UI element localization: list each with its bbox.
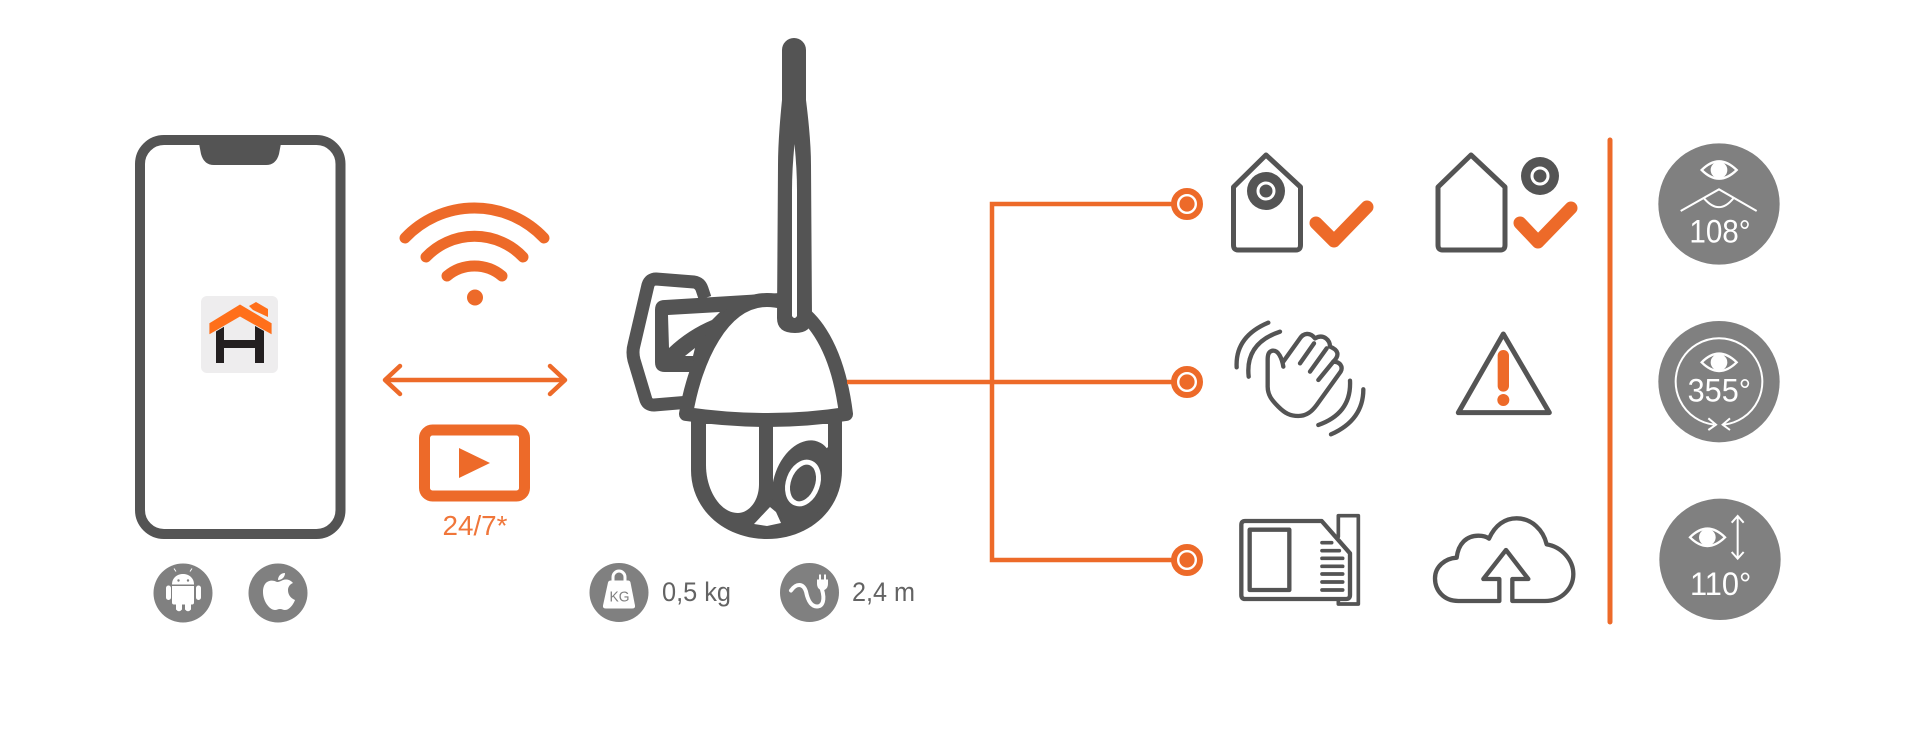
badge: 355 degrees xyxy=(1658,321,1780,442)
icon: cloud upload xyxy=(1435,518,1573,601)
antenna xyxy=(777,38,812,333)
target dot: top xyxy=(1174,191,1200,217)
double arrow xyxy=(385,366,565,394)
icon: alert triangle xyxy=(1458,334,1549,413)
app logo xyxy=(201,296,278,373)
icon: android badge xyxy=(154,564,212,622)
badge: 110 degrees: 110° xyxy=(1690,566,1751,602)
spec: weight xyxy=(590,563,648,622)
phone xyxy=(140,138,340,534)
text: weight value: 0,5 kg xyxy=(662,577,731,607)
mount plate xyxy=(655,293,780,372)
vertical divider xyxy=(1608,140,1612,622)
camera xyxy=(633,38,846,539)
target dot: bottom xyxy=(1174,547,1200,573)
wall bracket xyxy=(633,279,705,405)
badge: 110 degrees xyxy=(1659,499,1781,620)
spec: cable xyxy=(780,563,839,622)
connector lines xyxy=(847,204,1172,560)
dome xyxy=(686,300,846,420)
icon: waving hand xyxy=(1237,323,1363,434)
icon: apple badge xyxy=(248,564,308,622)
spec: weight: KG xyxy=(610,588,630,606)
icon: SD card xyxy=(1241,516,1358,604)
icon: indoor camera check xyxy=(1234,155,1367,250)
target dot: middle xyxy=(1174,369,1200,395)
icon: wifi xyxy=(405,208,544,306)
text: cable value: 2,4 m xyxy=(852,577,915,607)
badge: 108 degrees: 108° xyxy=(1689,214,1751,250)
badge: 108 degrees xyxy=(1658,143,1780,265)
icon: video stream xyxy=(424,430,524,496)
label: 24/7*: 24/7* xyxy=(442,510,508,541)
badge: 355 degrees: 355° xyxy=(1688,373,1751,409)
icon: outdoor camera check xyxy=(1438,155,1571,250)
lower body xyxy=(691,420,845,539)
